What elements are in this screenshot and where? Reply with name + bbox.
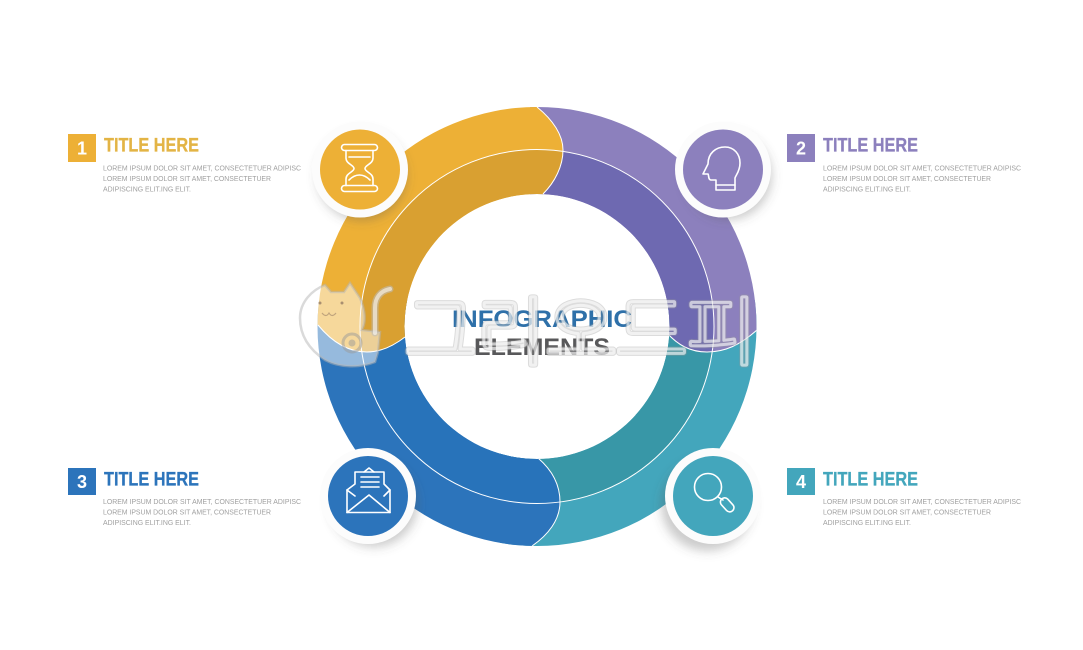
number badge 1: 1 — [77, 138, 87, 158]
description 4: LOREM IPSUM DOLOR SIT AMET, CONSECTETUER — [823, 510, 991, 516]
description 2: LOREM IPSUM DOLOR SIT AMET, CONSECTETUER ADIPISC — [823, 166, 1021, 172]
title 1: TITLE HERE — [104, 136, 199, 156]
circular ring diagram — [317, 106, 757, 546]
description 3: ADIPISCING ELIT.ING ELIT. — [103, 520, 191, 527]
watermark: site name: 그리오드피 — [405, 295, 757, 369]
description 1: LOREM IPSUM DOLOR SIT AMET, CONSECTETUER — [103, 176, 271, 183]
watermark — [300, 283, 757, 369]
item 4 — [787, 468, 1021, 527]
description 1: LOREM IPSUM DOLOR SIT AMET, CONSECTETUER ADIPISC — [103, 166, 301, 172]
description 2 — [823, 166, 1021, 194]
title 3: TITLE HERE — [104, 470, 199, 490]
center title — [452, 306, 632, 361]
badge 3: envelope — [320, 448, 416, 544]
segment 2: purple — [530, 107, 756, 352]
description 4: ADIPISCING ELIT.ING ELIT. — [823, 520, 911, 527]
number badge 2: 2 — [796, 138, 806, 158]
description 3 — [103, 499, 301, 527]
item 2 — [787, 134, 1021, 194]
description 2: LOREM IPSUM DOLOR SIT AMET, CONSECTETUER — [823, 176, 991, 183]
watermark: site name: 그리오드피 — [405, 295, 757, 369]
description 4 — [823, 499, 1021, 527]
description 1 — [103, 166, 301, 194]
badge 1: hourglass — [312, 122, 408, 218]
number badge 2 — [787, 134, 815, 162]
icon: magnifying glass — [694, 474, 736, 514]
icon: head profile — [703, 147, 740, 190]
icon: hourglass — [342, 144, 378, 192]
item 1 — [68, 134, 301, 194]
segment 4: teal — [500, 300, 756, 546]
number badge 3 — [68, 468, 96, 495]
description 1: ADIPISCING ELIT.ING ELIT. — [103, 186, 191, 194]
number badge 3: 3 — [77, 472, 87, 492]
description 2: ADIPISCING ELIT.ING ELIT. — [823, 186, 911, 194]
center title: ELEMENTS — [474, 334, 610, 361]
description 4: LOREM IPSUM DOLOR SIT AMET, CONSECTETUER ADIPISC — [823, 499, 1021, 506]
description 3: LOREM IPSUM DOLOR SIT AMET, CONSECTETUER ADIPISC — [103, 499, 301, 506]
badge 4: magnifier — [665, 448, 761, 544]
segment 3: blue — [318, 300, 560, 546]
number badge 4 — [787, 468, 815, 495]
badge 2: head — [675, 122, 771, 218]
badge shadows — [317, 131, 772, 551]
watermark: cat logo — [300, 283, 390, 366]
title 2: TITLE HERE — [823, 136, 918, 156]
center title: INFOGRAPHIC — [452, 306, 632, 333]
number badge 4: 4 — [796, 472, 806, 492]
number badge 1 — [68, 134, 96, 162]
item 3 — [68, 468, 301, 527]
title 4: TITLE HERE — [823, 470, 918, 490]
description 3: LOREM IPSUM DOLOR SIT AMET, CONSECTETUER — [103, 510, 271, 516]
icon: open envelope — [347, 468, 390, 512]
segment 1: gold — [318, 107, 562, 352]
